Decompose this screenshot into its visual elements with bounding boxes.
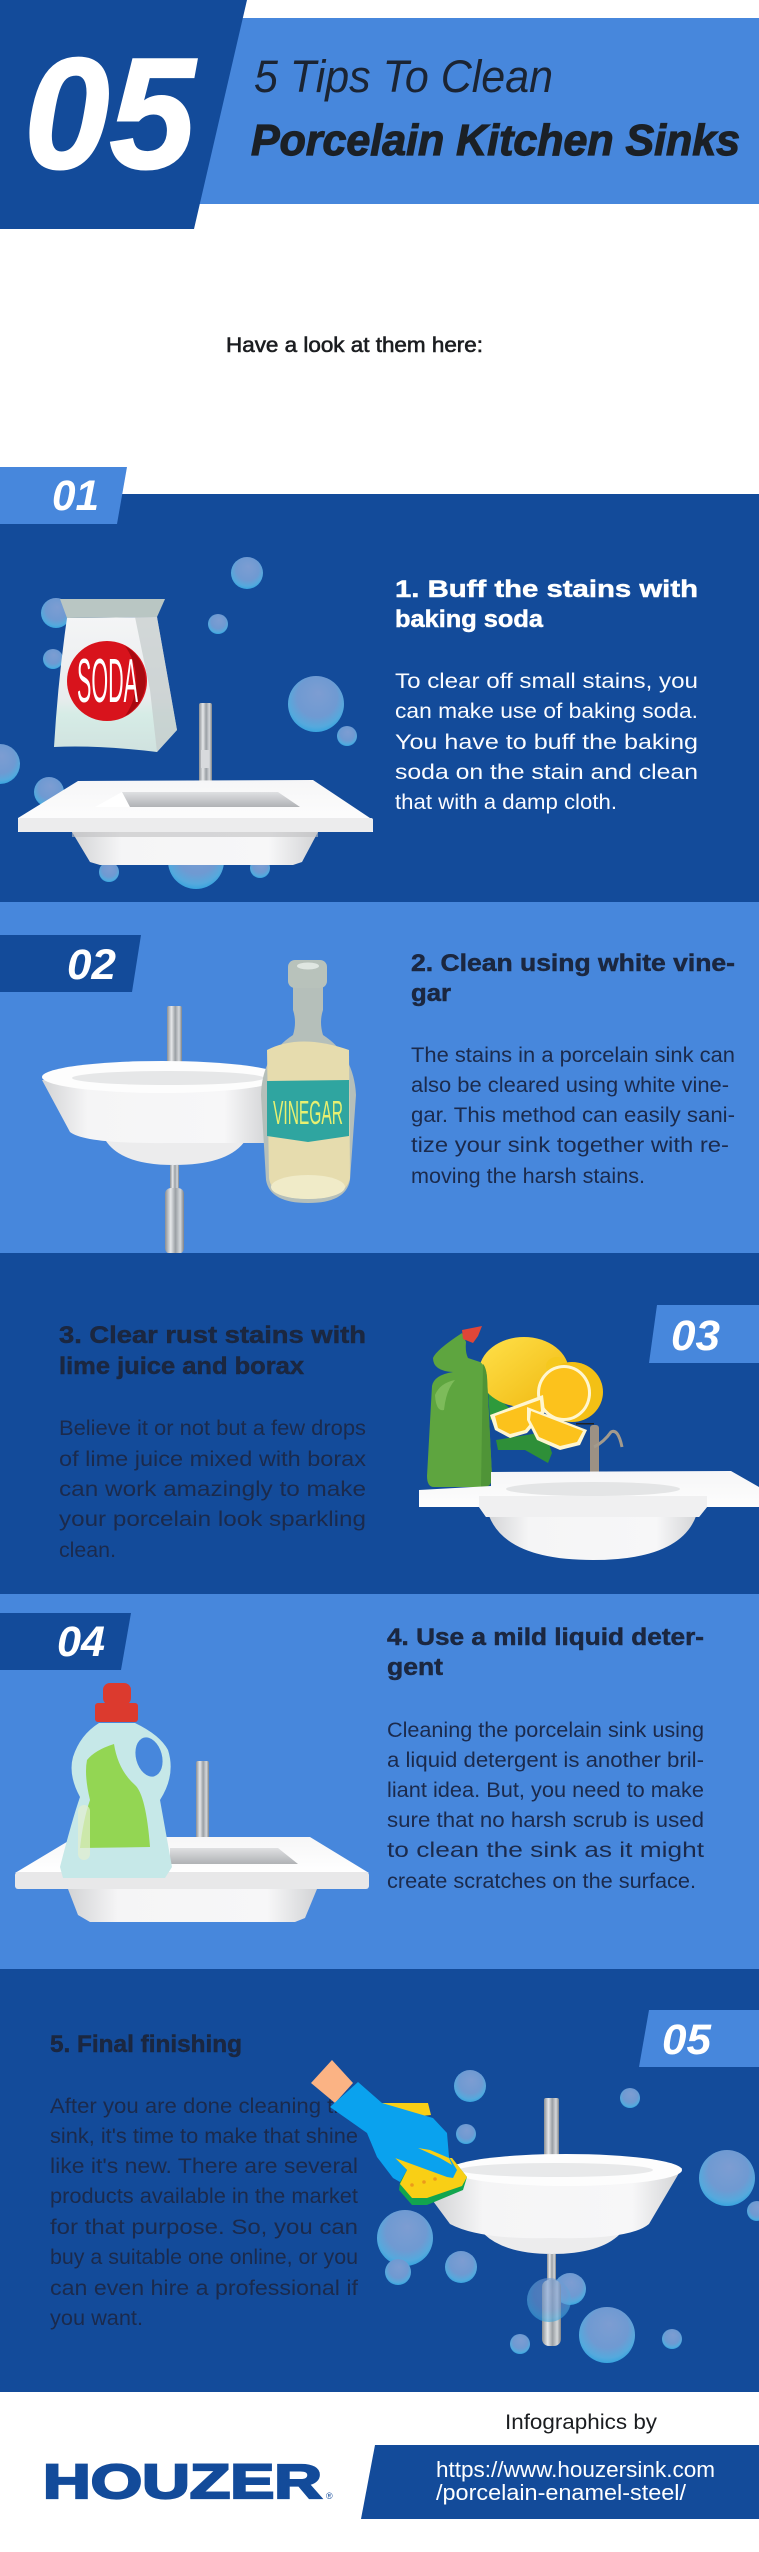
body text (411, 1043, 735, 1188)
bubbles (377, 2070, 759, 2363)
body text (50, 2094, 358, 2330)
header banner: 5 Tips To Clean (254, 51, 553, 102)
tag 05: 05 (662, 2016, 712, 2064)
heading (387, 1624, 704, 1681)
body text: you want. (50, 2306, 143, 2330)
heading: gent (387, 1654, 443, 1681)
body text: soda on the stain and clean (395, 760, 698, 784)
body text: Believe it or not but a few drops (59, 1416, 366, 1440)
heading (395, 576, 698, 633)
heading: lime juice and borax (59, 1353, 305, 1380)
body text (59, 1416, 366, 1562)
tag 03 (649, 1305, 759, 1363)
body text: moving the harsh stains. (411, 1164, 645, 1188)
heading (59, 1322, 366, 1380)
icon: counter sink (419, 1471, 759, 1560)
tag 02: 02 (67, 941, 116, 989)
icon: faucet (196, 1761, 209, 1845)
heading (411, 950, 735, 1007)
heading: 4. Use a mild liquid deter- (387, 1624, 704, 1651)
icon: gloved hand with sponge (311, 2060, 467, 2205)
tag 04: 04 (57, 1618, 105, 1666)
body text: liant idea. But, you need to make (387, 1778, 704, 1802)
header banner: 05 (24, 26, 197, 202)
body text: After you are done cleaning the (50, 2094, 358, 2118)
panel 1: baking soda (0, 467, 759, 902)
logo: Houzer: ® (326, 2491, 333, 2501)
icon: green bottle (427, 1326, 492, 1487)
panel 3: lime juice and borax (0, 1253, 759, 1594)
body text: can work amazingly to make (59, 1477, 366, 1501)
logo: Houzer (43, 2456, 333, 2509)
heading: 5. Final finishing (50, 2031, 242, 2058)
icon: faucet and drain (527, 2098, 571, 2346)
body text: that with a damp cloth. (395, 790, 617, 814)
link bar: https://www.houzersink.com (436, 2457, 715, 2482)
body text: like it's new. There are several (50, 2154, 358, 2178)
icon: faucet and drain (165, 1006, 184, 1254)
header banner (0, 0, 759, 229)
body text: can even hire a professional if (50, 2276, 358, 2300)
header banner: Porcelain Kitchen Sinks (251, 116, 740, 165)
body text: your porcelain look sparkling (59, 1507, 366, 1531)
icon: soda bag: SODA (77, 647, 138, 716)
tag 01: 01 (52, 472, 99, 520)
body text: The stains in a porcelain sink can (411, 1043, 735, 1067)
body text: To clear off small stains, you (395, 669, 698, 693)
body text: sink, it's time to make that shine (50, 2124, 358, 2148)
intro line: Have a look at them here: (226, 334, 483, 357)
body text (387, 1718, 704, 1893)
tag 05 (639, 2010, 759, 2067)
icon: bronze faucet (576, 1423, 622, 1475)
icon: square sink (18, 780, 373, 865)
tag 02 (0, 935, 141, 992)
body text: of lime juice mixed with borax (59, 1447, 366, 1471)
link bar: /porcelain-enamel-steel/ (436, 2480, 687, 2505)
heading: 3. Clear rust stains with (59, 1322, 366, 1349)
icon: vinegar bottle: VINEGAR (273, 1094, 343, 1131)
panel 2: white vinegar (0, 902, 759, 1254)
body text (395, 669, 698, 814)
panel 4: liquid detergent (0, 1594, 759, 1969)
body text: sure that no harsh scrub is used (387, 1808, 704, 1832)
body text: can make use of baking soda. (395, 699, 698, 723)
body text: tize your sink together with re- (411, 1133, 729, 1157)
body text: buy a suitable one online, or you (50, 2245, 358, 2269)
body text: gar. This method can easily sani- (411, 1103, 735, 1127)
panel 5: final finishing (0, 1969, 759, 2392)
icon: square sink (15, 1837, 369, 1922)
heading: baking soda (395, 606, 544, 633)
tag 03: 03 (671, 1312, 720, 1360)
body text: You have to buff the baking (395, 730, 698, 754)
credit line: Infographics by (505, 2411, 658, 2434)
footer (43, 2411, 759, 2519)
body text: also be cleared using white vine- (411, 1073, 729, 1097)
heading: 1. Buff the stains with (395, 576, 698, 603)
icon: soda bag (54, 599, 177, 752)
body text: clean. (59, 1538, 116, 1562)
tag 04 (0, 1613, 131, 1670)
bubbles behind sink (0, 557, 357, 889)
body text: a liquid detergent is another bril- (387, 1748, 704, 1772)
body text: to clean the sink as it might (387, 1838, 704, 1862)
icon: round sink (42, 1061, 282, 1165)
body text: products available in the market (50, 2184, 358, 2208)
logo: Houzer: HOUZER (43, 2456, 322, 2509)
icon: faucet (199, 703, 212, 788)
icon: vinegar bottle (261, 960, 356, 1203)
heading: 2. Clean using white vine- (411, 950, 735, 977)
icon: round sink (433, 2154, 682, 2254)
heading: gar (411, 980, 451, 1007)
body text: Cleaning the porcelain sink using (387, 1718, 704, 1742)
icon: lemons (479, 1337, 603, 1463)
body text: create scratches on the surface. (387, 1869, 696, 1893)
link bar (361, 2445, 759, 2519)
icon: detergent bottle (60, 1683, 172, 1878)
tag 01 (0, 467, 127, 524)
body text: for that purpose. So, you can (50, 2215, 358, 2239)
